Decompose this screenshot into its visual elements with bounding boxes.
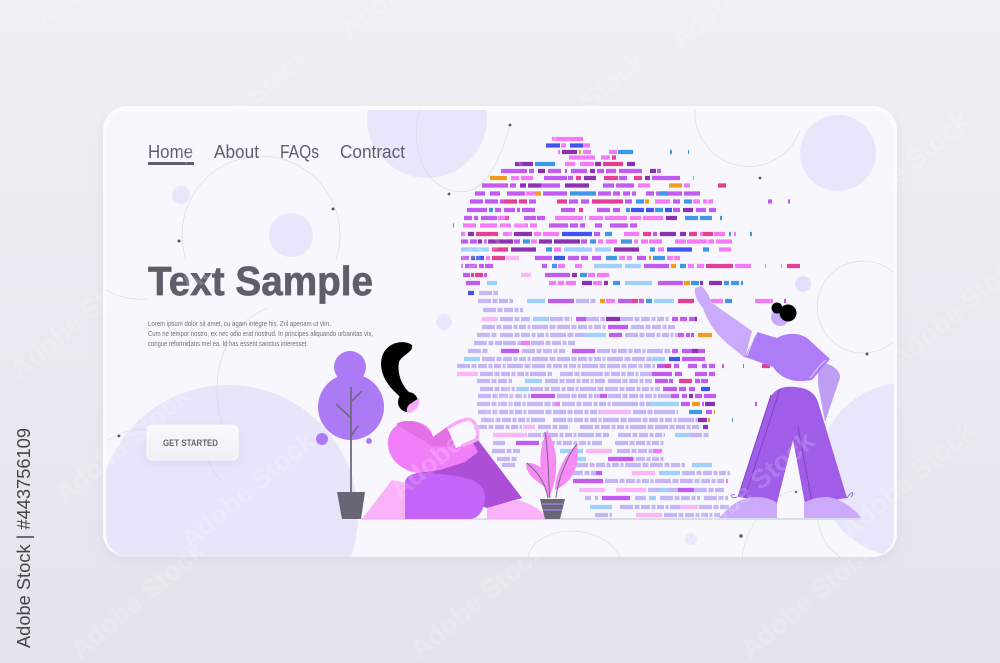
stock id label: Adobe Stock | #443756109 [14,428,34,648]
button: get started [147,425,238,460]
title: Text Sample [148,258,373,304]
watermarks: Adobe Stock [675,425,821,555]
watermarks: Adobe Stock [835,415,981,545]
woman's sweater [388,421,478,473]
man's raised arm [695,286,752,358]
icon: potted plant [526,430,578,519]
woman's sweater shading [396,421,455,447]
watermarks: Adobe Stock [175,170,321,300]
woman's raised leg [405,440,522,508]
panel: landing page card [103,106,897,557]
data bars forming a head silhouette [453,139,800,515]
navigation menu [148,142,405,165]
watermarks: Adobe Stock [385,205,531,335]
man's pants [738,387,847,504]
ground line [362,518,862,520]
watermarks: Adobe Stock [385,375,531,505]
watermarks: Adobe Stock [405,535,551,663]
body text: Lorem ipsum dolor sit amet, cu agam integre his. Zril aperiam ut vim. [148,319,331,328]
watermarks: Adobe Stock [830,105,976,235]
woman's hair [381,342,418,412]
watermarks: Adobe Stock [170,40,316,170]
body text: congue reformidans mel ea. Id has essent sanctus interesset. [148,339,308,348]
watermarks: Adobe Stock [50,380,196,510]
watermarks: Adobe Stock [175,425,321,555]
nav: FAQs: FAQs [280,142,319,162]
icon: tree [316,351,384,519]
nav: Contract: Contract [340,142,405,162]
man's far arm [818,363,840,422]
figure: standing man [695,286,862,518]
watermarks: Adobe Stock [65,535,211,663]
button: get started: GET STARTED [163,438,218,448]
woman's face [407,398,419,413]
nav: Home: Home [148,142,193,162]
man's head [771,308,789,326]
man's shoes [719,497,862,518]
man's shirt [745,332,830,381]
body text [148,319,373,348]
watermarks: Adobe Stock [5,255,151,385]
man's pants seams [738,389,812,502]
background circles and arcs [106,110,894,557]
watermarks: Adobe Stock [505,45,651,175]
nav: About: About [214,142,259,162]
man's hair [772,302,796,322]
woman's hands [448,420,478,446]
man's shoelaces [731,493,853,498]
watermarks: Adobe Stock [735,535,881,663]
woman's lower leg [405,473,485,519]
woman's shoes [362,480,547,519]
figure: seated woman [362,342,547,519]
body text: Cum ne tempor nostro, ex nec odio erat nostrud. In principes aliquando urbanitas vix, [148,329,373,338]
man's shirt cuffs [747,333,826,378]
